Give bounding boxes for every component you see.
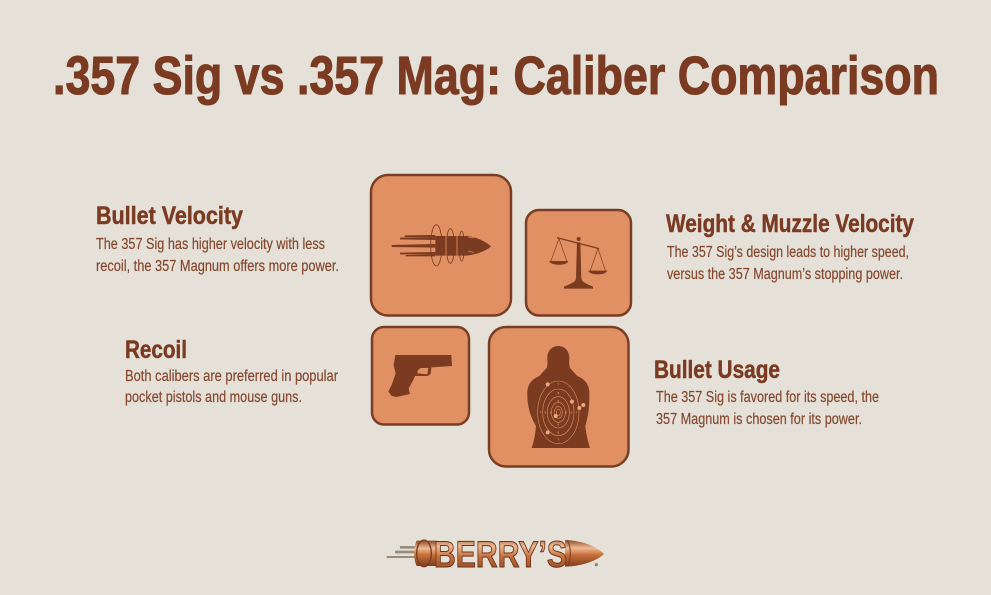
target ring numbers: 8 (557, 391, 559, 395)
icon: logo bullet (387, 540, 604, 567)
logo wordmark: BERRY’S (434, 534, 567, 575)
icon: speeding bullet (392, 225, 491, 266)
icon: balance scales (549, 237, 607, 289)
text block: recoil: pocket pistols and mouse guns. (125, 389, 302, 406)
text block: weight and muzzle velocity (667, 244, 909, 283)
target ring numbers: 9 (557, 422, 559, 426)
panel: bullet tile (371, 175, 511, 316)
text block: bullet usage: The 357 Sig is favored for its speed, the (656, 389, 879, 406)
panel: weight and muzzle velocity text (666, 210, 914, 283)
text block: weight and muzzle velocity: versus the 357 Magnum’s stopping power. (667, 266, 903, 283)
text block: bullet usage (656, 389, 879, 428)
panel: bullet usage text (654, 356, 879, 428)
icon: pistol (388, 355, 452, 397)
target ring numbers: 8 (544, 411, 546, 415)
target ring numbers: 9 (557, 399, 559, 403)
text block: bullet velocity: The 357 Sig has higher velocity with less (96, 236, 325, 253)
target ring numbers: 9 (550, 411, 552, 415)
target ring numbers: 7 (540, 411, 542, 415)
text block: recoil (125, 368, 338, 406)
heading: bullet velocity: Bullet Velocity (96, 202, 243, 230)
panel: recoil text (125, 336, 338, 406)
target ring numbers: 7 (557, 438, 559, 442)
text block: weight and muzzle velocity: The 357 Sig’s design leads to higher speed, (667, 244, 909, 261)
target ring numbers: 7 (575, 411, 577, 415)
panel: scales tile (526, 210, 631, 316)
heading: weight and muzzle velocity: Weight & Muzzle Velocity (666, 210, 914, 238)
heading: bullet usage: Bullet Usage (654, 356, 780, 384)
panel: bullet velocity text (96, 202, 339, 275)
text block: bullet usage: 357 Magnum is chosen for its power. (656, 411, 862, 428)
target ring numbers: 8 (570, 411, 572, 415)
text block: bullet velocity (96, 236, 339, 275)
target ring numbers: 9 (565, 411, 567, 415)
heading: recoil: Recoil (125, 336, 187, 364)
text block: recoil: Both calibers are preferred in popular (125, 368, 338, 385)
target ring numbers: 8 (557, 430, 559, 434)
logo: Berry's (387, 534, 604, 575)
text block: bullet velocity: recoil, the 357 Magnum offers more power. (96, 258, 339, 275)
target ring numbers (540, 382, 577, 442)
panel: pistol tile (372, 327, 469, 424)
icon: silhouette target (527, 346, 590, 448)
target ring numbers: 7 (557, 382, 559, 386)
panel: target tile (489, 327, 628, 466)
